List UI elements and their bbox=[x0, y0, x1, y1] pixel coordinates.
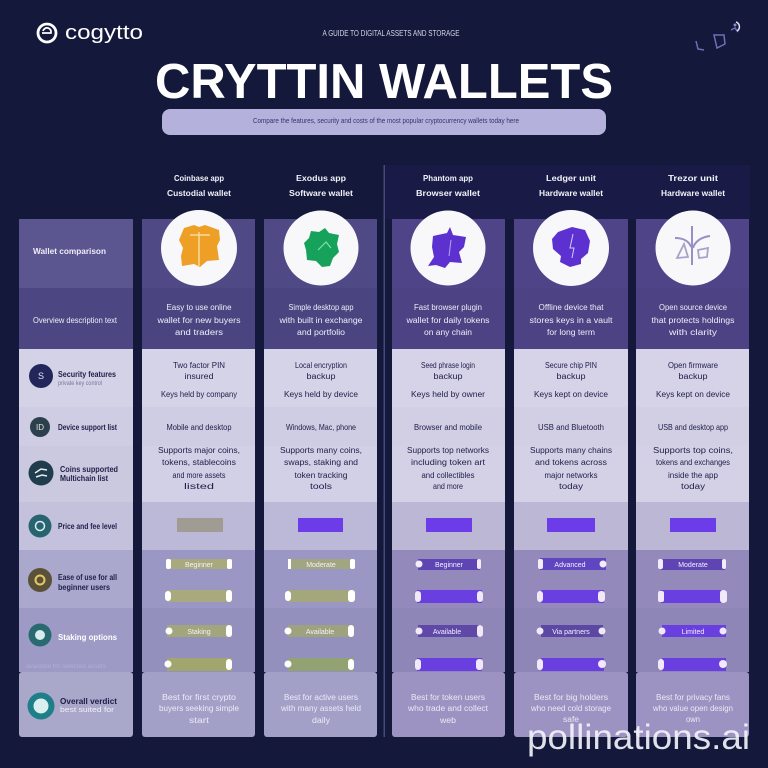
icon: purple badge bbox=[410, 210, 486, 286]
coins text: and tokens across bbox=[535, 458, 607, 467]
watermark: pollinations.ai bbox=[527, 718, 750, 757]
subtitle bar bbox=[162, 109, 606, 135]
pill: ease bbox=[658, 559, 726, 570]
column heading: Software wallet bbox=[289, 188, 353, 198]
overview text bbox=[405, 303, 490, 337]
pill: ease: Beginner bbox=[435, 562, 464, 569]
verdict text: who value open design bbox=[652, 704, 733, 713]
coins text: Supports many chains bbox=[530, 446, 612, 455]
row: verdict bbox=[28, 692, 117, 720]
security text: Keys kept on device bbox=[656, 390, 731, 399]
row: support: Staking options bbox=[58, 632, 117, 642]
column heading bbox=[416, 173, 480, 198]
overview text: Open source device bbox=[659, 303, 728, 312]
column heading: Custodial wallet bbox=[167, 188, 231, 198]
icon: green badge bbox=[284, 210, 358, 286]
pill: ease: Advanced bbox=[554, 562, 586, 569]
pill: ease: Beginner bbox=[185, 562, 214, 569]
verdict text: safe bbox=[563, 715, 580, 724]
verdict text bbox=[652, 693, 733, 724]
verdict text: Best for token users bbox=[411, 693, 485, 702]
overview text: and traders bbox=[175, 328, 223, 337]
overview text: for long term bbox=[547, 328, 595, 337]
row: rating bbox=[28, 514, 117, 538]
security text bbox=[656, 361, 731, 399]
security text bbox=[411, 361, 485, 399]
row: security: private key control bbox=[58, 381, 102, 387]
overview text: Fast browser plugin bbox=[414, 303, 482, 312]
column heading: Ledger unit bbox=[546, 173, 596, 183]
row: type: Device support list bbox=[58, 423, 117, 432]
pill: ease bbox=[288, 559, 355, 569]
row: usability: beginner users bbox=[58, 583, 110, 592]
row: compatibility: Coins supported bbox=[60, 465, 118, 474]
overview text bbox=[652, 303, 734, 337]
price tag bbox=[298, 518, 343, 532]
device text: USB and Bluetooth bbox=[538, 423, 604, 432]
verdict text: buyers seeking simple bbox=[159, 704, 240, 713]
pill: ease bbox=[416, 559, 481, 570]
pill: staking level bbox=[658, 658, 727, 671]
column heading: Browser wallet bbox=[416, 188, 480, 198]
coins text: Supports top coins, bbox=[653, 446, 733, 455]
pill: ease bbox=[166, 559, 232, 569]
overview text: Easy to use online bbox=[166, 303, 232, 312]
security text: Open firmware bbox=[668, 361, 719, 370]
verdict text bbox=[530, 693, 612, 724]
coins text bbox=[158, 446, 240, 491]
icon: leaf badge bbox=[656, 210, 730, 286]
security text bbox=[284, 361, 359, 399]
coins text: swaps, staking and bbox=[284, 458, 358, 467]
coins text bbox=[653, 446, 733, 491]
coins text: and more assets bbox=[172, 471, 226, 480]
row: support bbox=[26, 624, 117, 670]
overview text: wallet for new buyers bbox=[156, 316, 240, 325]
price tag bbox=[426, 518, 472, 532]
security text: Secure chip PIN bbox=[545, 361, 597, 370]
security text: backup bbox=[678, 372, 708, 381]
device text: Windows, Mac, phone bbox=[286, 423, 356, 432]
security text bbox=[534, 361, 609, 399]
row: verdict: Overall verdict bbox=[60, 697, 117, 706]
coins text: Supports major coins, bbox=[158, 446, 240, 455]
coins text: Supports many coins, bbox=[280, 446, 362, 455]
row: rating: Price and fee level bbox=[58, 522, 117, 531]
column heading bbox=[539, 173, 603, 198]
device text: USB and desktop app bbox=[658, 423, 728, 432]
pill: ease: Moderate bbox=[306, 562, 336, 569]
device text: Mobile and desktop bbox=[166, 423, 232, 432]
coins text: tokens and exchanges bbox=[656, 458, 730, 467]
overview text: that protects holdings bbox=[652, 316, 734, 325]
icon: orange badge bbox=[161, 210, 237, 286]
pill: ease level bbox=[537, 590, 605, 603]
pill: ease bbox=[538, 558, 606, 570]
coins text bbox=[530, 446, 612, 491]
subtitle bar: Compare the features, security and costs of the most popular cryptocurrency wallets today here bbox=[253, 116, 519, 125]
column heading: Hardware wallet bbox=[539, 188, 603, 198]
overview text: wallet for daily tokens bbox=[405, 316, 490, 325]
verdict text: own bbox=[686, 715, 700, 724]
verdict text: web bbox=[439, 716, 457, 725]
overview text: stores keys in a vault bbox=[530, 316, 613, 325]
pill: ease level bbox=[285, 590, 355, 602]
coins text: major networks bbox=[544, 471, 598, 480]
column heading: Phantom app bbox=[423, 173, 473, 183]
device text: Browser and mobile bbox=[414, 423, 483, 432]
coins text: token tracking bbox=[294, 471, 348, 480]
row: type: ID bbox=[36, 423, 44, 432]
overview text: with built in exchange bbox=[278, 316, 363, 325]
coins text bbox=[407, 446, 489, 491]
pill: staking: Staking bbox=[187, 629, 211, 636]
pill: staking: Available bbox=[433, 629, 461, 636]
coins text: listed bbox=[184, 482, 214, 491]
pill: ease level bbox=[165, 590, 232, 602]
verdict text: Best for privacy fans bbox=[656, 693, 730, 702]
coins text: today bbox=[681, 482, 705, 491]
verdict text: Best for big holders bbox=[534, 693, 608, 702]
verdict text: who need cold storage bbox=[530, 704, 612, 713]
panel: wallet column 3 bbox=[392, 173, 505, 737]
coins text: and collectibles bbox=[422, 471, 474, 480]
verdict text: daily bbox=[312, 716, 330, 725]
logo bbox=[38, 22, 143, 44]
row: compatibility bbox=[28, 460, 118, 486]
security text: Keys held by company bbox=[161, 390, 237, 399]
column heading bbox=[167, 173, 231, 198]
pill: staking: Via partners bbox=[552, 629, 590, 636]
panel: wallet column 2 bbox=[264, 173, 377, 737]
decorative corner mark bbox=[696, 22, 739, 50]
pill: ease: Moderate bbox=[678, 562, 708, 569]
price tag bbox=[177, 518, 223, 532]
icon: purple shield badge bbox=[533, 210, 609, 286]
verdict text: Best for active users bbox=[284, 693, 358, 702]
coins text bbox=[280, 446, 362, 491]
coins text: inside the app bbox=[668, 471, 719, 480]
panel: wallet column 1 bbox=[142, 173, 255, 737]
security text: Local encryption bbox=[295, 361, 347, 370]
pill: staking bbox=[536, 625, 606, 637]
panel: wallet column 4 bbox=[514, 173, 628, 737]
label: wallet: Wallet comparison bbox=[33, 247, 106, 256]
security text: backup bbox=[434, 372, 463, 381]
row: security bbox=[29, 364, 116, 388]
security text: backup bbox=[306, 372, 336, 381]
coins text: tokens, stablecoins bbox=[162, 458, 236, 467]
row: usability: Ease of use for all bbox=[58, 573, 117, 582]
coins text: today bbox=[559, 482, 583, 491]
row: verdict: best suited for bbox=[60, 705, 115, 714]
row: security: Security features bbox=[58, 370, 116, 379]
verdict text: start bbox=[189, 716, 210, 725]
overview text: and portfolio bbox=[297, 328, 346, 337]
security text: Seed phrase login bbox=[421, 361, 475, 370]
pill: staking bbox=[658, 625, 726, 637]
pill: staking bbox=[166, 625, 232, 637]
column heading: Trezor unit bbox=[668, 173, 718, 183]
row: support: available for selected assets bbox=[26, 663, 107, 670]
price tag bbox=[547, 518, 595, 532]
verdict text bbox=[280, 693, 361, 725]
security text: Keys held by device bbox=[284, 390, 359, 399]
coins text: and more bbox=[433, 482, 463, 491]
column heading bbox=[661, 173, 725, 198]
pill: ease level bbox=[415, 590, 483, 603]
coins text: Supports top networks bbox=[407, 446, 489, 455]
pill: ease level bbox=[658, 590, 727, 603]
security text: Keys held by owner bbox=[411, 390, 485, 399]
verdict text bbox=[159, 693, 240, 725]
label: description: Overview description text bbox=[33, 316, 118, 325]
title: CRYTTIN WALLETS bbox=[155, 55, 613, 109]
pill: staking bbox=[416, 625, 483, 637]
security text: Two factor PIN bbox=[173, 361, 225, 370]
panel: wallet column 5 bbox=[636, 173, 749, 737]
pill: staking level bbox=[415, 658, 483, 671]
security text: insured bbox=[184, 372, 214, 381]
pill: staking: Limited bbox=[682, 629, 704, 636]
price tag bbox=[670, 518, 716, 532]
column heading: Exodus app bbox=[296, 173, 346, 183]
verdict text: who trade and collect bbox=[407, 704, 489, 713]
row: security: S bbox=[38, 371, 44, 381]
coins text: including token art bbox=[411, 458, 486, 467]
top tagline: A GUIDE TO DIGITAL ASSETS AND STORAGE bbox=[322, 29, 460, 38]
column heading: Coinbase app bbox=[174, 173, 224, 183]
logo: cogytto bbox=[65, 22, 143, 44]
overview text: Offline device that bbox=[538, 303, 604, 312]
verdict text: Best for first crypto bbox=[162, 693, 237, 702]
row: compatibility: Multichain list bbox=[60, 474, 108, 483]
column heading: Hardware wallet bbox=[661, 188, 725, 198]
pill: staking level bbox=[537, 658, 606, 671]
overview text bbox=[530, 303, 613, 337]
column heading bbox=[289, 173, 353, 198]
security text bbox=[161, 361, 237, 399]
panel: row labels column bbox=[19, 219, 133, 737]
overview text bbox=[156, 303, 240, 337]
overview text: on any chain bbox=[424, 328, 472, 337]
row: type bbox=[30, 417, 117, 437]
coins text: tools bbox=[310, 482, 332, 491]
pill: staking bbox=[284, 625, 354, 637]
pill: staking level bbox=[164, 658, 232, 671]
verdict text bbox=[407, 693, 489, 725]
pill: staking level bbox=[284, 658, 354, 671]
security text: Keys kept on device bbox=[534, 390, 609, 399]
row: usability bbox=[28, 568, 117, 592]
security text: backup bbox=[556, 372, 586, 381]
overview text: Simple desktop app bbox=[288, 303, 354, 312]
pill: staking: Available bbox=[306, 629, 334, 636]
overview text: with clarity bbox=[668, 328, 717, 337]
overview text bbox=[278, 303, 363, 337]
verdict text: with many assets held bbox=[280, 704, 361, 713]
